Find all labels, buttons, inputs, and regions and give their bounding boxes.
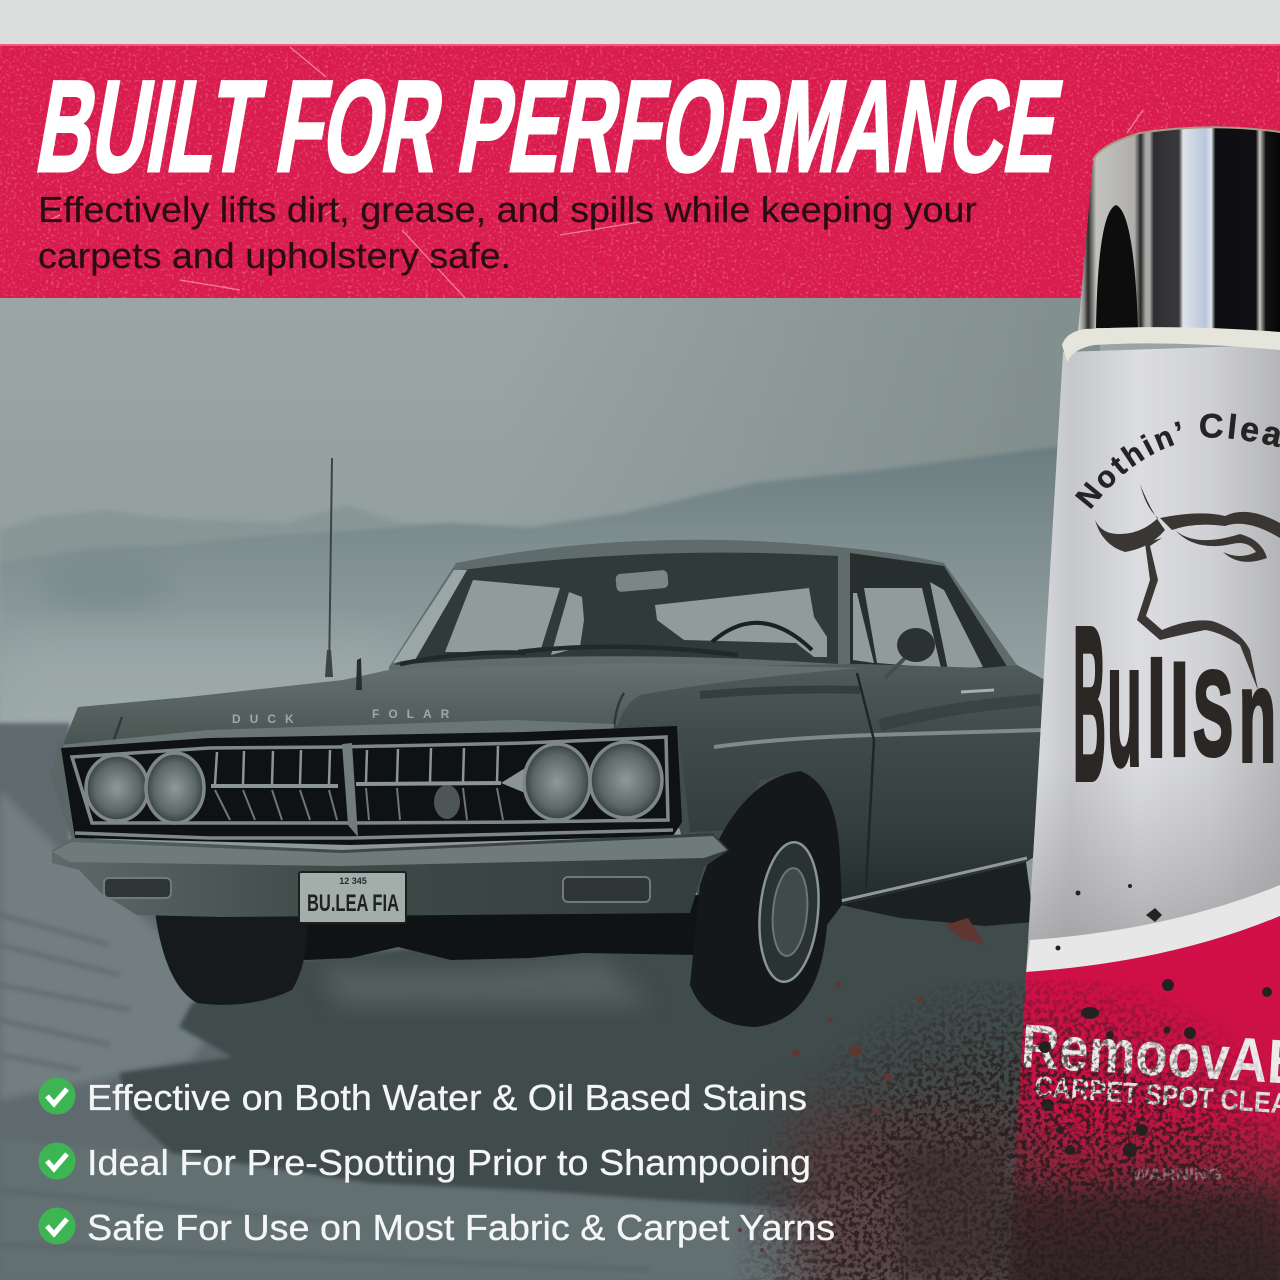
can collar	[1062, 327, 1280, 362]
bullsn wordmark: l	[1147, 636, 1166, 785]
antenna	[325, 458, 333, 677]
bullsn wordmark	[1076, 626, 1274, 782]
top grey strip	[0, 0, 1280, 44]
bullsn wordmark: l	[1170, 641, 1189, 782]
warning label: WARNING	[1132, 1165, 1222, 1184]
wipers	[400, 647, 738, 664]
right fender	[614, 722, 800, 905]
hood lettering: DUCK	[232, 712, 303, 726]
bullsn wordmark: S	[1193, 647, 1233, 781]
mirror	[885, 628, 935, 678]
hood front lip	[60, 720, 614, 756]
subtitle	[38, 189, 977, 276]
icon: check	[38, 1078, 76, 1114]
band texture	[0, 44, 1280, 298]
left front tyre	[155, 912, 307, 1005]
door underside	[840, 862, 1034, 926]
bumper lights	[104, 877, 650, 902]
icon: check	[38, 1208, 76, 1244]
car roof	[389, 540, 1017, 675]
grille bars	[211, 743, 530, 837]
can body	[1008, 346, 1280, 1280]
icon: check	[38, 1142, 76, 1180]
dirt flakes	[738, 918, 985, 1252]
headlights	[86, 742, 662, 823]
windshield	[393, 553, 838, 665]
licence plate: 12 345	[339, 876, 367, 886]
bullsn wordmark: B	[1073, 580, 1106, 827]
benefit: pre-spotting: Ideal For Pre-Spotting Prior to Shampooing	[87, 1142, 811, 1183]
body trims	[700, 673, 1042, 901]
car	[50, 458, 1045, 1027]
red header band	[0, 44, 1280, 298]
side windows	[850, 553, 1008, 670]
licence plate	[299, 872, 406, 923]
subtitle: Effectively lifts dirt, grease, and spills while keeping your	[38, 189, 977, 230]
scene background: misty hills and road	[0, 298, 1280, 1280]
bull logo	[1095, 484, 1280, 690]
grille emblem	[434, 785, 460, 819]
dirt cloud	[700, 980, 1280, 1280]
front bumper	[52, 833, 729, 917]
benefit: water and oil stains: Effective on Both Water & Oil Based Stains	[87, 1077, 807, 1118]
speckles on can	[1039, 884, 1272, 1157]
can cap	[1078, 127, 1280, 335]
car shadow	[119, 900, 1045, 1207]
underbody	[200, 895, 700, 960]
left fender surround	[50, 740, 95, 840]
white swoosh band	[1026, 885, 1280, 972]
hood	[60, 663, 860, 752]
red base	[1000, 916, 1280, 1280]
hood ornament	[356, 658, 362, 690]
road surface lower left	[0, 1140, 820, 1280]
grille face	[61, 726, 682, 845]
spray can	[1008, 126, 1280, 1280]
bullsn wordmark: u	[1107, 607, 1142, 803]
benefit: fabric and carpet yarns: Safe For Use on Most Fabric & Carpet Yarns	[87, 1207, 835, 1248]
hood lettering: FOLAR	[372, 707, 458, 721]
hood lettering	[232, 707, 458, 726]
licence plate: BU.LEA FIA	[307, 890, 399, 917]
subtitle: carpets and upholstery safe.	[38, 235, 511, 276]
side body	[600, 664, 1045, 905]
bumper highlight	[52, 836, 727, 866]
grille frame	[72, 737, 673, 838]
right front tyre and arch	[690, 771, 842, 1027]
